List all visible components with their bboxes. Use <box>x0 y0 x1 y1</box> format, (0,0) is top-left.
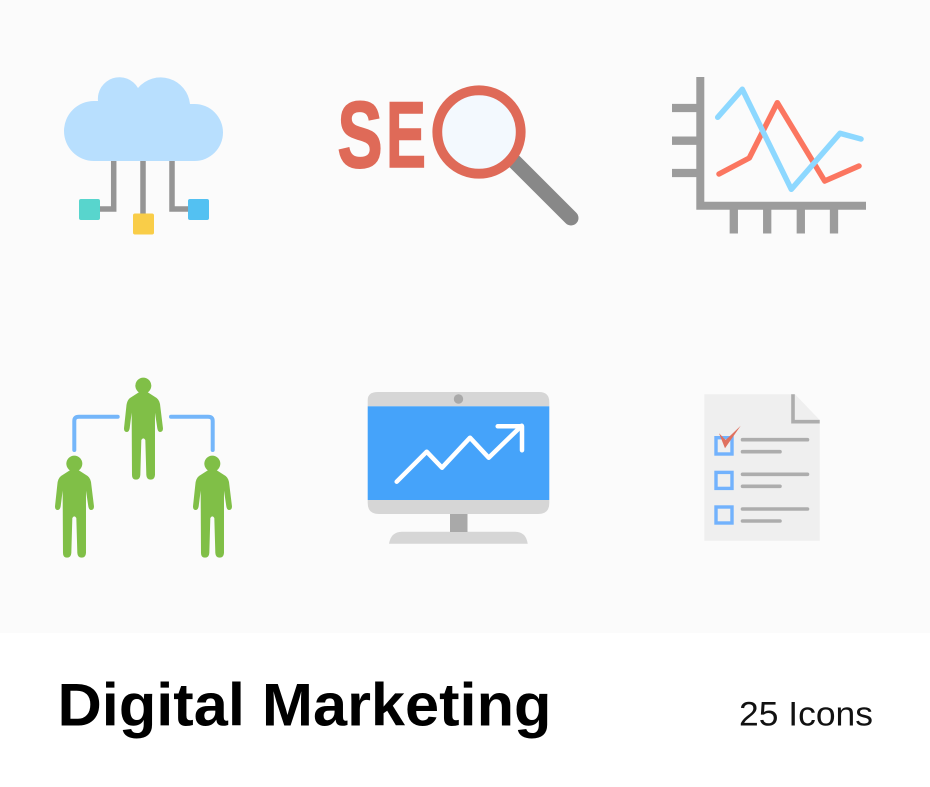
icon: checklist document <box>704 394 820 541</box>
icon: monitor with growth chart <box>368 392 549 544</box>
icon: person left <box>55 456 94 558</box>
icon: SEO magnifier: S <box>338 82 382 187</box>
icon: people network <box>55 378 232 558</box>
icon: SEO magnifier: E <box>386 82 426 187</box>
icon count label: 25 Icons <box>739 696 873 734</box>
icon: person right <box>193 456 232 558</box>
icon: cloud network <box>64 77 223 234</box>
icon: SEO magnifier <box>338 82 571 218</box>
title: Digital Marketing <box>58 672 552 738</box>
icon: person top <box>124 378 163 480</box>
icon: line chart <box>672 77 866 234</box>
